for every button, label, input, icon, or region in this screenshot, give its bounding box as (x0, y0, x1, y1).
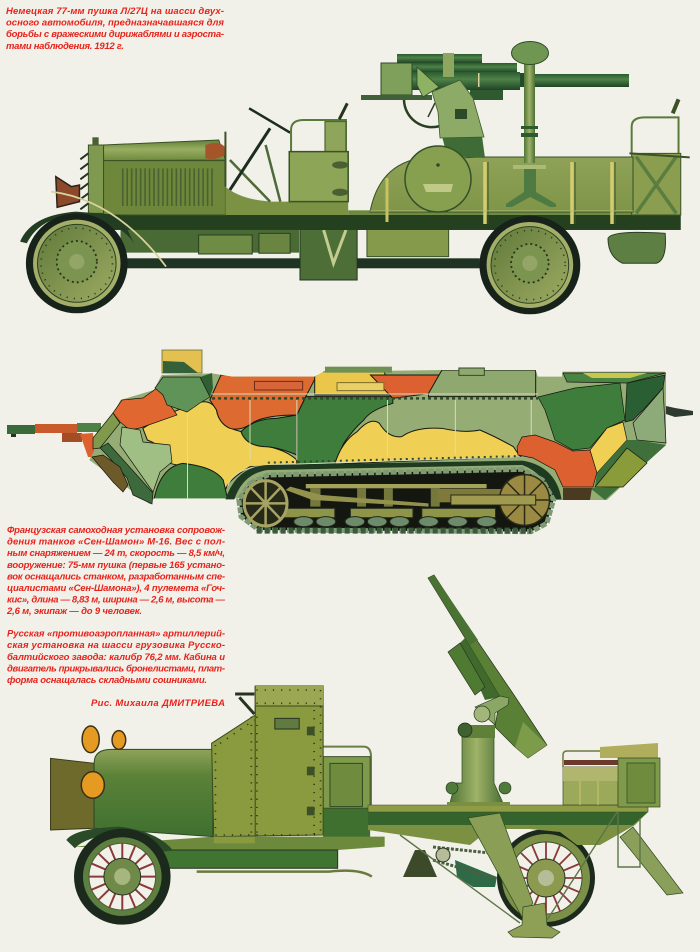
truck bed (370, 157, 633, 224)
rear machine gun (666, 406, 693, 417)
track (239, 469, 554, 532)
front idler (244, 481, 287, 526)
caption: Russian anti-aircraft truck: балтийского завода: калибр 76,2 мм. Кабина и (7, 652, 225, 663)
cupola and base (155, 350, 213, 412)
camouflage: rear lower green (590, 440, 666, 500)
caption: French Saint-Chamond gun: кис», длина — 8,83 м, ширина — 2,6 м, высота — (7, 595, 226, 606)
hood (94, 749, 213, 837)
running gear (244, 475, 550, 527)
hull with camouflage (85, 367, 670, 507)
vehicle: Saint-Chamond M-16 tank gun (7, 350, 693, 532)
chassis frame (89, 210, 681, 230)
top hatch (459, 368, 484, 375)
lower side box (367, 219, 449, 257)
caption: French Saint-Chamond gun (6, 525, 226, 617)
driver seat box (289, 103, 348, 202)
caption: Russian anti-aircraft truck: ская установка на шасси грузовика Русско- (7, 640, 225, 651)
vehicle: Russo-Balt anti-aircraft truck (51, 575, 683, 938)
caption: Russian anti-aircraft truck: Русская «противоаэропланная» артиллерий- (7, 629, 225, 640)
trunnion and gears (458, 696, 509, 738)
rear stabiliser leg (620, 827, 683, 895)
drive shaft (127, 258, 480, 268)
stay rods and bracket (400, 812, 640, 923)
caption: German 77-mm gun: осного автомобиля, предназначавшаяся для (6, 18, 224, 29)
rear tank (608, 232, 666, 263)
gun barrel and sleigh (428, 575, 547, 758)
camouflage: central green (297, 397, 393, 465)
hull front plates (92, 388, 177, 504)
radiator (80, 137, 104, 213)
caption: German 77-mm gun: Немецкая 77-мм пушка Л/27Ц на шасси двух- (6, 6, 224, 17)
engine hood (104, 132, 348, 215)
track arch (225, 461, 562, 499)
camouflage: top yellow (315, 372, 395, 395)
round shield (405, 146, 471, 212)
windshield rods and steering wheel (230, 108, 290, 202)
front wheel (26, 213, 128, 313)
gun mount shield (417, 67, 484, 138)
camouflage: green patch (241, 415, 297, 455)
breech box and platform (361, 63, 432, 100)
sight post (506, 42, 556, 207)
caption: French Saint-Chamond gun: вооружение: 75-мм пушка (первые 165 устано- (7, 560, 225, 571)
camouflage: left orange (210, 375, 317, 429)
main stabiliser leg (468, 813, 560, 938)
front fender stay (51, 192, 166, 267)
armour cab lever (235, 694, 254, 714)
caption: French Saint-Chamond gun: вок оснащались станком, разработанным спе- (7, 571, 225, 582)
camouflage: rear sage plate (633, 388, 666, 443)
camouflage: rear olive (595, 448, 647, 487)
camouflage: rear dark plate (625, 375, 665, 422)
pedestal and base (446, 737, 511, 806)
gun pedestal (442, 136, 485, 158)
rear wheel (497, 829, 595, 927)
elevation handwheel (404, 100, 440, 127)
top machinery (254, 367, 392, 391)
caption: French Saint-Chamond gun: циалистами «Сен-Шамона»), 4 пулемета «Гоч- (7, 583, 225, 594)
platform (368, 805, 648, 812)
caption: French Saint-Chamond gun: ным снаряжением — 24 т, скорость — 8,5 км/ч, (7, 548, 225, 559)
recoil cylinder (448, 643, 485, 695)
front wheel (74, 829, 171, 925)
caption: Russian anti-aircraft truck: форма оснащалась складными сошниками. (7, 675, 207, 686)
front plate (51, 758, 94, 830)
gun barrel (7, 423, 101, 457)
front fender (66, 827, 173, 852)
camouflage: left yellow (143, 402, 297, 490)
artist credit: Рис. Михаила ДМИТРИЕВА (91, 698, 225, 709)
rear wheel (479, 216, 580, 314)
cab lower body (73, 808, 385, 877)
track shoes bottom (257, 528, 531, 534)
caption: German 77-mm gun: тами наблюдения. 1912 г. (6, 41, 124, 52)
left support and chain drive (403, 847, 497, 887)
headlamps (81, 726, 126, 798)
gearbox (300, 227, 357, 280)
camouflage: top orange (371, 375, 444, 398)
caption: French Saint-Chamond gun: Французская самоходная установка сопровож- (7, 525, 225, 536)
caption: French Saint-Chamond gun: дения танков «Сен-Шамон» М-16. Вес с пол- (7, 537, 225, 548)
front fender (20, 212, 134, 243)
gun tubes (397, 53, 629, 100)
platform underside (368, 812, 648, 845)
caption: German 77-mm gun (6, 6, 224, 52)
camouflage: lower left green (154, 463, 228, 499)
rear drive wheel (451, 475, 550, 525)
armoured cab (212, 686, 323, 843)
camouflage: middle yellow (335, 421, 520, 464)
camouflage: right yellow (590, 422, 627, 473)
engine underside (121, 230, 299, 254)
camouflage: rear top strip (563, 373, 666, 383)
vehicle: German anti-aircraft truck (20, 42, 690, 314)
louvers (123, 168, 212, 206)
camouflage: top sage (429, 370, 536, 397)
rear rail and tailgate (629, 99, 690, 215)
hull rear camouflage (517, 373, 666, 500)
camouflage: right green (538, 383, 625, 450)
caption: Russian anti-aircraft truck (7, 629, 225, 686)
rail and panel seams (187, 394, 538, 498)
hull bottom brown (563, 488, 592, 500)
rear cab box (323, 747, 371, 808)
headlamp (56, 177, 79, 207)
caption: French Saint-Chamond gun: 2,6 м, экипаж — до 9 человек. (6, 606, 142, 617)
caption: Russian anti-aircraft truck: двигатель прикрывались бронелистами, плат- (7, 663, 225, 674)
camouflage: right orange (517, 435, 597, 487)
caption: German 77-mm gun: борьбы с вражескими дирижаблями и аэроста- (6, 29, 224, 40)
rear seat and box (563, 743, 660, 807)
